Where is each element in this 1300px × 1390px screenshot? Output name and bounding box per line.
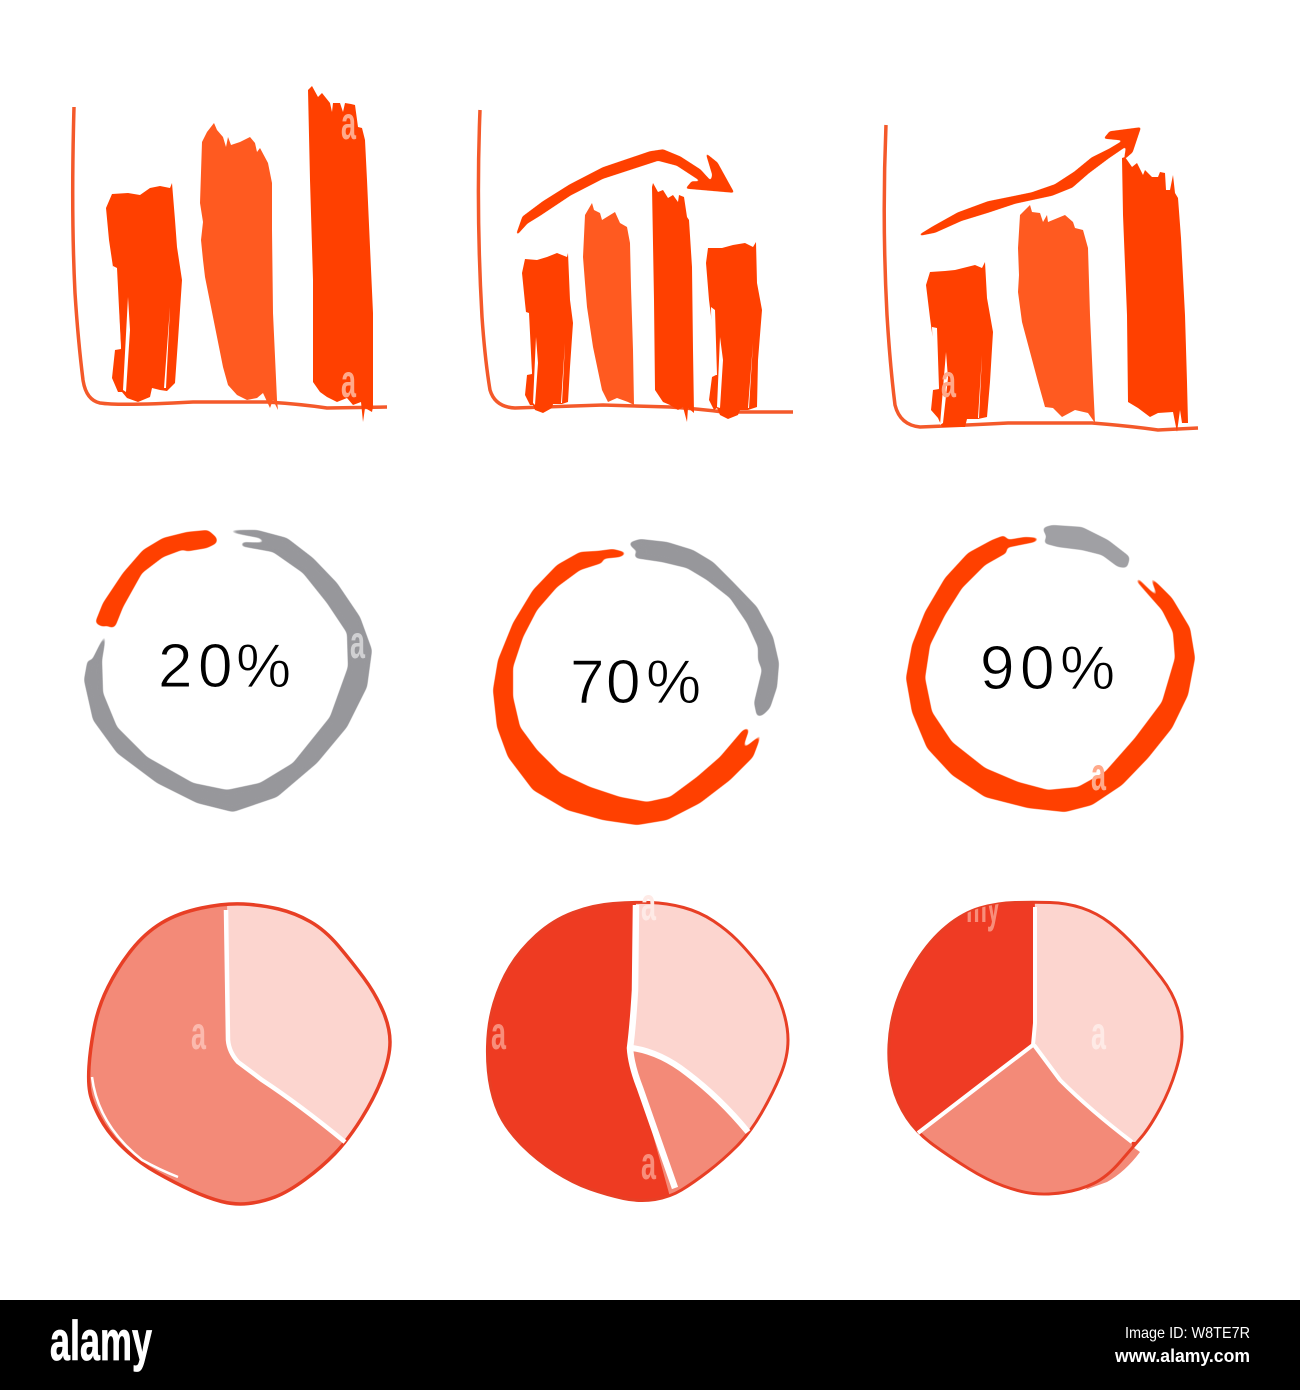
watermark letters: a [941,355,956,407]
arrow: rising trend [920,128,1140,235]
label: 70%: 70% [570,648,701,717]
watermark letters: a [341,355,356,407]
watermark letters: a [1091,748,1106,800]
pie: three even slices [887,900,1184,1196]
logo: alamy: alamy [50,1309,152,1372]
pie: two slices [80,895,400,1215]
chart: bars with rising arrow [884,125,1198,432]
watermark letters: a [641,878,656,930]
watermark letters: my [966,880,1000,932]
watermark letters [191,97,1106,1189]
ring: 20% [84,530,372,812]
ring: 90% [906,525,1195,812]
watermark letters: a [491,1007,506,1059]
chart: bars with falling arrow [478,110,793,422]
watermark letters: a [1091,1007,1106,1059]
label: 20%: 20% [158,632,291,701]
arrow: falling trend [517,150,733,234]
watermark letters: a [191,1007,206,1059]
pie: three slices, large dark [486,900,790,1202]
footer bar [0,1300,1300,1390]
watermark letters: a [350,616,365,668]
image id: Image ID: W8TE7R [1125,1325,1250,1342]
chart: rising bars [73,86,387,422]
website: www.alamy.com [1114,1346,1250,1366]
ring: 70% [493,539,779,825]
watermark letters: a [641,1137,656,1189]
label: 90%: 90% [980,634,1115,703]
watermark letters: a [341,97,356,149]
